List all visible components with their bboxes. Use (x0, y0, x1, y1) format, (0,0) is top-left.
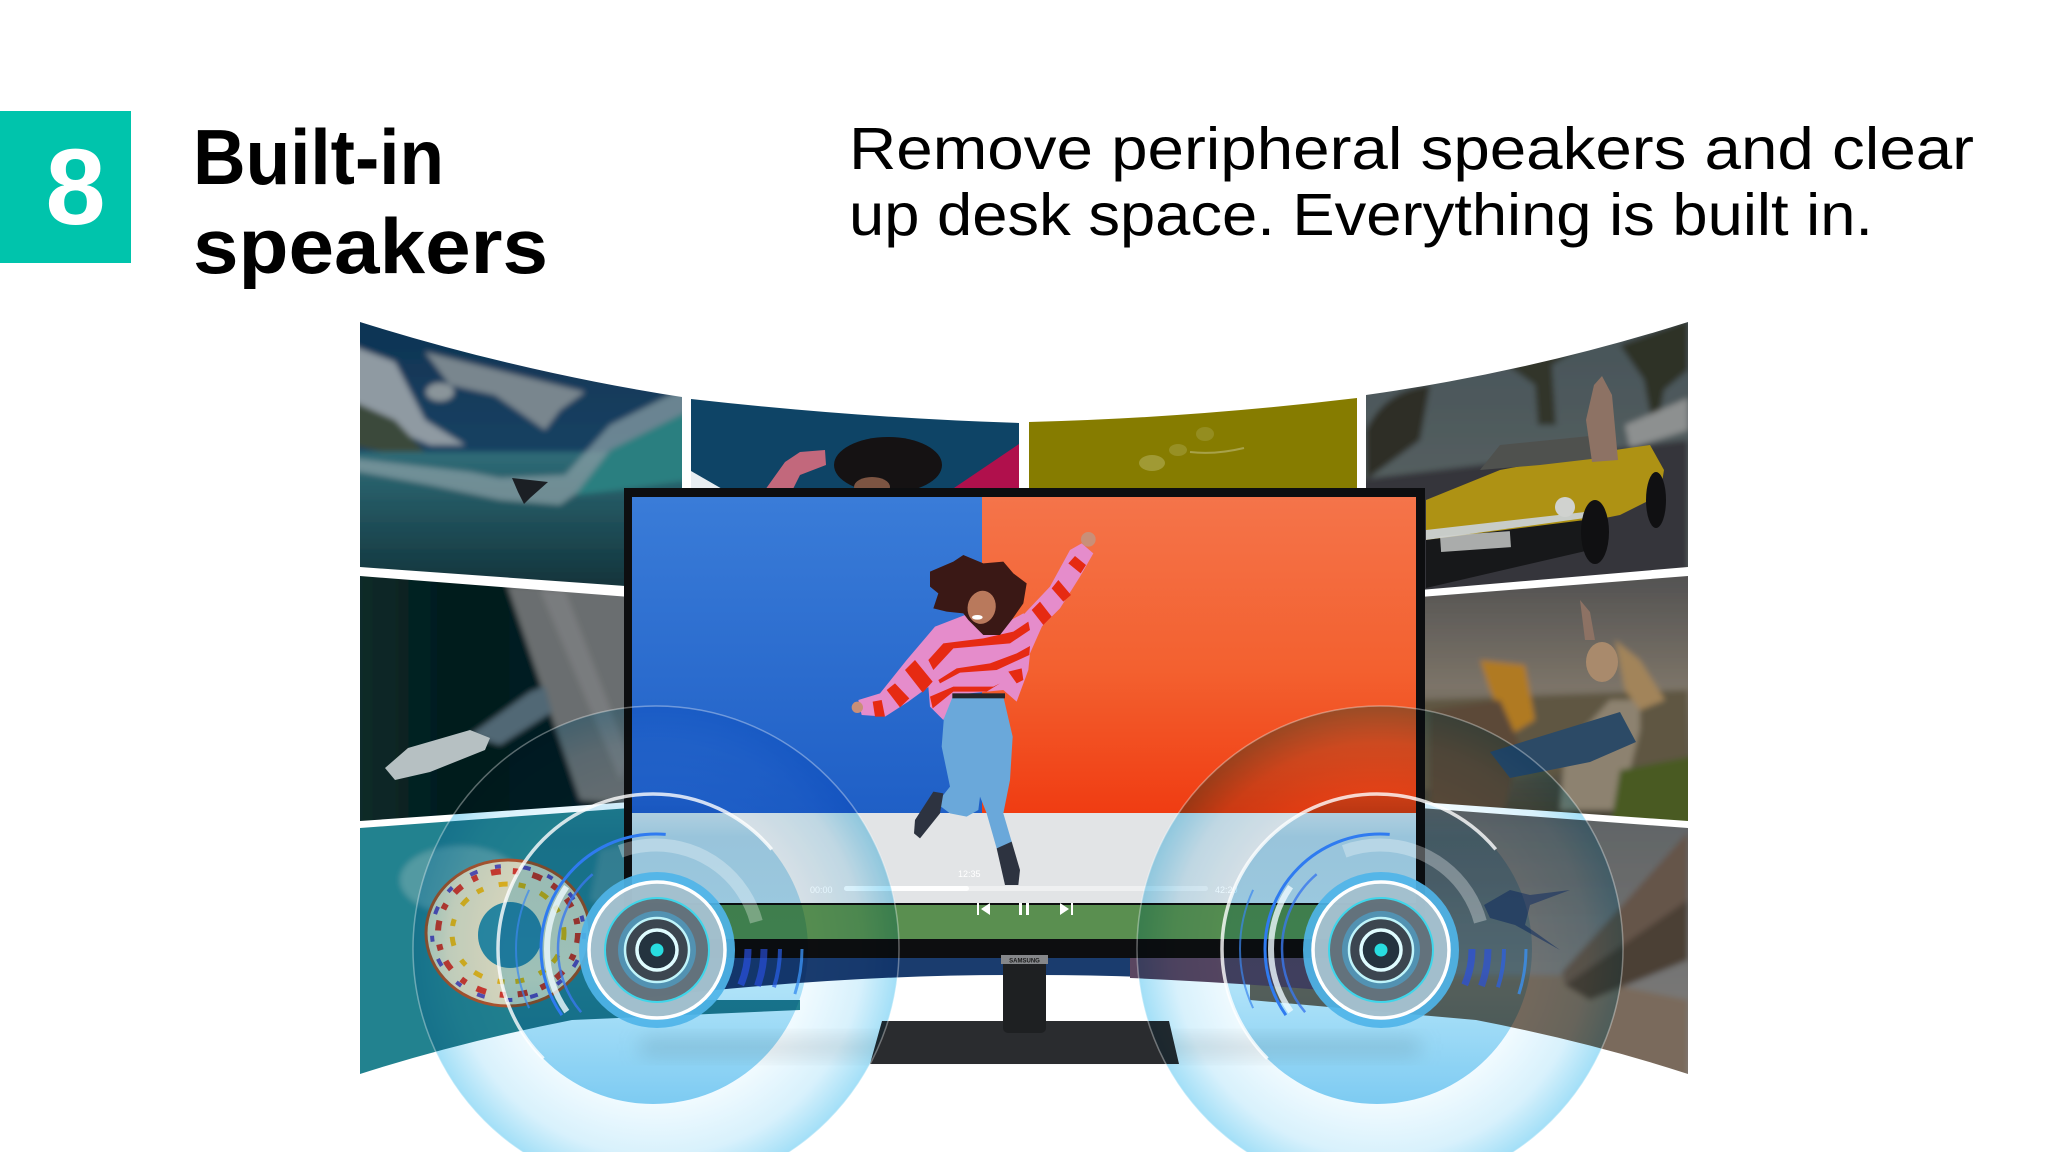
monitor (624, 488, 1425, 1000)
sweater stripes (873, 556, 1086, 717)
panel: surfer photo (360, 322, 682, 586)
monitor stand: SAMSUNG (1009, 958, 1040, 964)
panel: pier dancer photo (1250, 808, 1688, 1074)
number badge (0, 111, 131, 263)
shoes (914, 792, 943, 838)
panel: woman photo strip (691, 399, 1019, 488)
face (968, 590, 996, 624)
sweater (928, 613, 1043, 720)
lowered sleeve (858, 627, 940, 717)
title: Built-in (193, 113, 444, 201)
smile (972, 615, 983, 620)
under-monitor photo strip (624, 958, 1425, 1000)
hands (1081, 532, 1096, 547)
monitor stand (870, 955, 1179, 1064)
title: speakers (193, 202, 548, 290)
panel: olive abstract (1029, 398, 1357, 488)
video player controls: 12:35 (958, 869, 981, 879)
person jumping (852, 532, 1096, 885)
screen: blue wall (632, 497, 982, 814)
panel: yellow car photo (1366, 322, 1688, 590)
screen: orange wall (982, 497, 1416, 814)
description text (849, 116, 1974, 248)
description text: up desk space. Everything is built in. (849, 182, 1873, 248)
screen: grass (711, 905, 1327, 939)
video player controls: 00:00 (810, 885, 833, 895)
video player controls (810, 869, 1238, 915)
left speaker sound waves (413, 706, 899, 1152)
panel: dancing women photo (1425, 576, 1688, 821)
panel: boat photo (360, 576, 624, 821)
right speaker sound waves (1137, 706, 1623, 1152)
belt (952, 693, 1005, 698)
right speaker core (1303, 872, 1459, 1028)
title (193, 113, 548, 290)
raised arm (1024, 543, 1094, 626)
hair (930, 555, 1027, 635)
screen: pavement (632, 813, 1416, 903)
description text: Remove peripheral speakers and clear (849, 116, 1974, 182)
panel: donut float photo (360, 808, 800, 1074)
video player controls: 42:20 (1215, 885, 1238, 895)
jeans (937, 697, 1013, 850)
left speaker core (579, 872, 735, 1028)
number badge: 8 (45, 126, 106, 247)
monitor reflection shadow (640, 1040, 1420, 1054)
